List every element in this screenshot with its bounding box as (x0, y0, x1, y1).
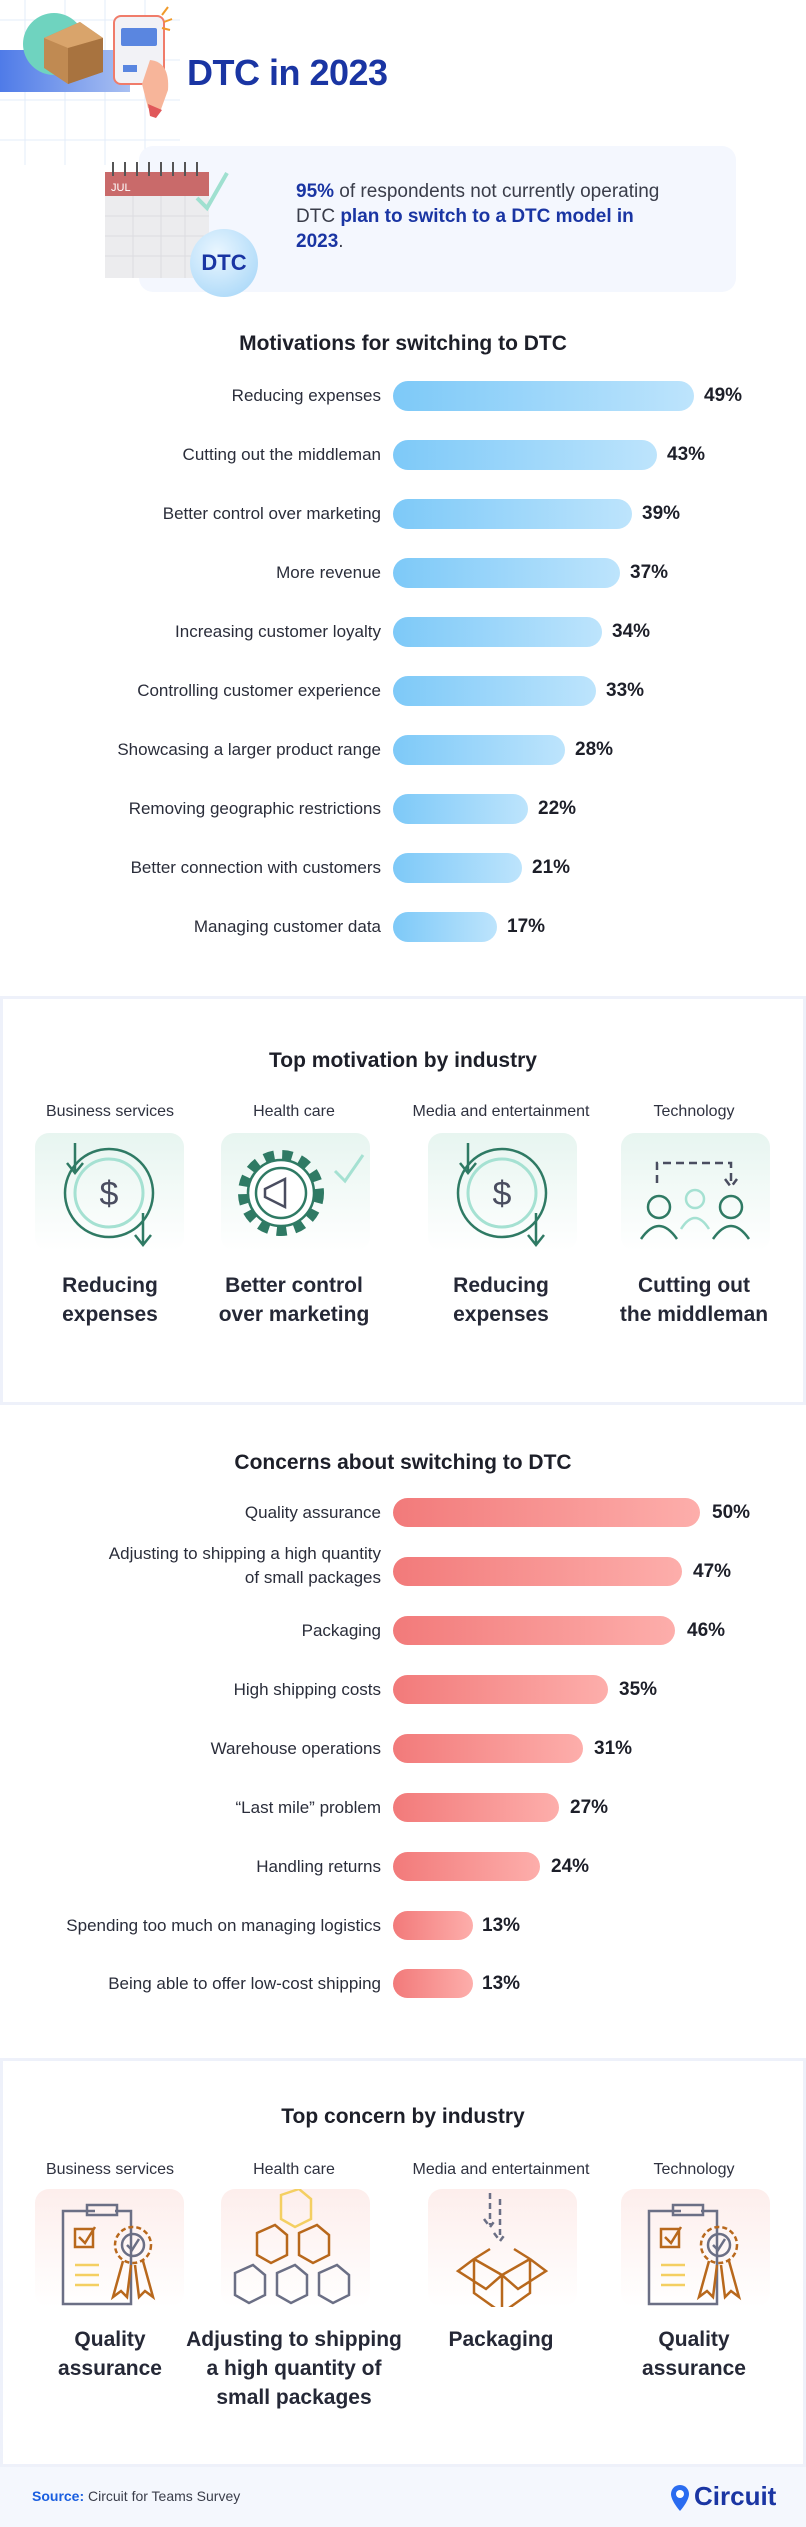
bar chart: concerns: 47% (693, 1561, 731, 1582)
labels: top concerns: assurance (642, 2357, 746, 2380)
labels: top motivations: the middleman (620, 1303, 768, 1326)
bar chart: motivations: Better control over marketing (163, 504, 381, 523)
labels: top motivations: Better control (225, 1274, 363, 1297)
icon: calendar with DTC badge (105, 162, 229, 278)
labels: top concerns: a high quantity of (206, 2357, 381, 2380)
bar chart: concerns: 46% (687, 1620, 725, 1641)
labels: top concerns (58, 2328, 746, 2409)
icon: middleman (621, 1133, 770, 1251)
heading: concerns: Concerns about switching to DTC (234, 1451, 572, 1474)
bar chart: motivations: 22% (538, 798, 576, 819)
icon: reducing expenses: $ (493, 1175, 512, 1213)
bar chart: motivations: Showcasing a larger product range (117, 740, 381, 759)
bar chart: concerns: Warehouse operations (211, 1739, 381, 1758)
heading: Top concern by industry (281, 2105, 525, 2128)
bar chart: concerns: 13% (482, 1915, 520, 1936)
icon: package (428, 2189, 577, 2307)
bar chart: motivations: Increasing customer loyalty (175, 622, 381, 641)
bar chart: concerns: High shipping costs (234, 1680, 381, 1699)
bar chart: motivations: More revenue (276, 563, 381, 582)
industry labels: Media and entertainment (412, 2161, 590, 2178)
labels: top concerns: assurance (58, 2357, 162, 2380)
labels: top motivations: over marketing (219, 1303, 369, 1326)
industry labels: Technology (654, 1103, 734, 1120)
industry labels: Business services (46, 2161, 174, 2178)
bar chart: concerns: 50% (712, 1502, 750, 1523)
labels: top motivations: Reducing (62, 1274, 158, 1297)
bar chart: concerns (66, 1498, 750, 1998)
labels: top concerns: Quality (74, 2328, 146, 2351)
industry labels: Health care (253, 1103, 335, 1120)
icon: stacked boxes (221, 2189, 370, 2307)
callout text: 2023. (296, 231, 344, 252)
callout text: 95% of respondents not currently operating (296, 181, 659, 202)
icon: reducing expenses: $ (100, 1175, 119, 1213)
labels: top concerns: Adjusting to shipping (186, 2328, 402, 2351)
bar chart: concerns: Being able to offer low-cost shipping (108, 1974, 381, 1993)
bar chart: motivations: Removing geographic restrictions (129, 799, 381, 818)
industry labels (46, 2161, 734, 2178)
labels: top motivations: expenses (453, 1303, 549, 1326)
icon: reducing expenses (428, 1133, 577, 1251)
icon: DTC circle: DTC (201, 250, 247, 275)
bar chart: concerns: Handling returns (256, 1857, 381, 1876)
icon: quality certificate (35, 2189, 184, 2307)
bar chart: motivations: 49% (704, 385, 742, 406)
bar chart: motivations: Better connection with customers (131, 858, 381, 877)
labels: top concerns: Packaging (448, 2328, 554, 2351)
bar chart: motivations (117, 381, 742, 942)
bar chart: motivations: 28% (575, 739, 613, 760)
bar chart: motivations: 21% (532, 857, 570, 878)
bar chart: motivations: 33% (606, 680, 644, 701)
callout: 95% stat (139, 146, 736, 292)
industry labels: Health care (253, 2161, 335, 2178)
bar chart: motivations: 34% (612, 621, 650, 642)
labels: top motivations: expenses (62, 1303, 158, 1326)
bar chart: motivations: Reducing expenses (232, 386, 381, 405)
panel: top motivation by industry (0, 996, 806, 1405)
bar chart: concerns: Adjusting to shipping a high quantity (109, 1544, 381, 1563)
heading: Top motivation by industry (269, 1049, 537, 1072)
industry labels: Media and entertainment (412, 1103, 590, 1120)
header illustration (0, 0, 180, 165)
source text: Source: Circuit for Teams Survey (32, 2488, 240, 2504)
bar chart: motivations: Controlling customer experience (137, 681, 381, 700)
bar chart: concerns: “Last mile” problem (236, 1798, 381, 1817)
icon: DTC circle (190, 229, 258, 297)
bar chart: concerns: Packaging (302, 1621, 381, 1640)
bar chart: concerns: 27% (570, 1797, 608, 1818)
bar chart: concerns: of small packages (245, 1568, 381, 1587)
bar chart: motivations: 39% (642, 503, 680, 524)
bar chart: motivations: Managing customer data (194, 917, 381, 936)
bar chart: concerns: 24% (551, 1856, 589, 1877)
icon: gear megaphone (221, 1133, 370, 1251)
icon: calendar with DTC badge: JUL (111, 182, 131, 194)
footer (0, 2467, 806, 2527)
industry labels: Technology (654, 2161, 734, 2178)
industry labels (46, 1103, 734, 1120)
bar chart: concerns: 31% (594, 1738, 632, 1759)
labels: top concerns: small packages (216, 2386, 372, 2409)
bar chart: concerns: 13% (482, 1973, 520, 1994)
bar chart: concerns: Quality assurance (245, 1503, 381, 1522)
heading: motivations: Motivations for switching to DTC (239, 332, 567, 355)
bar chart: concerns: 35% (619, 1679, 657, 1700)
callout text: DTC plan to switch to a DTC model in (296, 206, 634, 227)
logo: Circuit: Circuit (694, 2481, 776, 2511)
callout text (296, 181, 659, 252)
panel: top concern by industry (0, 2058, 806, 2467)
industry labels: Business services (46, 1103, 174, 1120)
labels: top motivations (62, 1274, 768, 1326)
bar chart: motivations: 37% (630, 562, 668, 583)
bar chart: motivations: Cutting out the middleman (183, 445, 381, 464)
icon: reducing expenses (35, 1133, 184, 1251)
labels: top motivations: Cutting out (638, 1274, 750, 1297)
bar chart: motivations: 43% (667, 444, 705, 465)
labels: top motivations: Reducing (453, 1274, 549, 1297)
labels: top concerns: Quality (658, 2328, 730, 2351)
bar chart: motivations: 17% (507, 916, 545, 937)
title: DTC in 2023 (187, 52, 388, 93)
icon: quality certificate (621, 2189, 770, 2307)
bar chart: concerns: Spending too much on managing logistics (66, 1916, 381, 1935)
